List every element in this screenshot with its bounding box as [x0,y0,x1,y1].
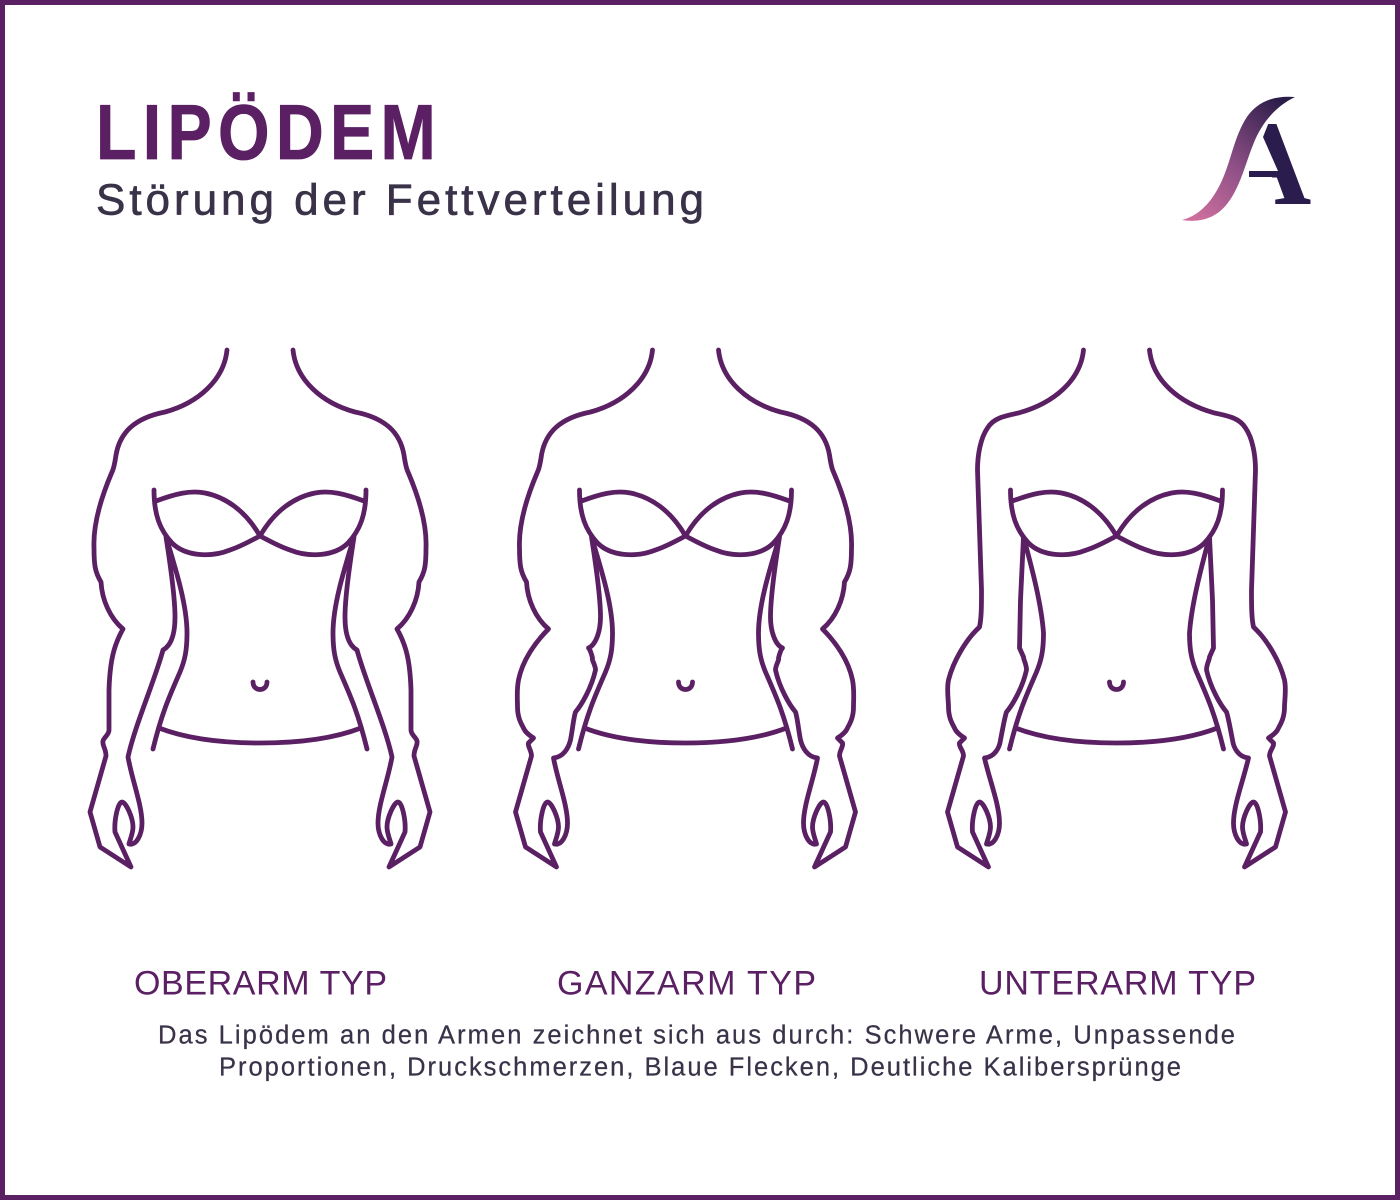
waist [159,728,361,743]
waist [584,728,786,743]
right arm outline and torso side [293,350,430,867]
right arm outline and torso side [1150,350,1286,867]
icon: logo [1182,97,1311,231]
figure: Unterarm Typ [948,350,1286,867]
subtitle: Störung der Fettverteilung [96,176,704,224]
navel [1110,682,1124,690]
description text: Das Lipödem an den Armen zeichnet sich aus durch: Schwere Arme, Unpassende [158,1022,1235,1050]
right arm outline and torso side [718,350,856,867]
label: Oberarm Typ: OBERARM TYP [134,964,387,1002]
left arm outline and torso side [948,350,1084,867]
title: LIPÖDEM [96,89,442,176]
bra [154,490,366,555]
figure: Oberarm Typ [90,350,430,867]
left arm outline and torso side [516,350,652,867]
bra [580,490,792,555]
description text: Proportionen, Druckschmerzen, Blaue Flecken, Deutliche Kalibersprünge [219,1054,1181,1082]
label: Unterarm Typ: UNTERARM TYP [979,964,1256,1002]
figure: Ganzarm Typ [516,350,856,867]
label: Ganzarm Typ: GANZARM TYP [557,964,816,1002]
navel [678,682,692,690]
bra [1010,490,1222,555]
navel [253,682,267,690]
description text [158,1022,1235,1082]
left arm outline and torso side [90,350,227,867]
icon: logo: A [1224,97,1311,231]
waist [1016,728,1218,743]
